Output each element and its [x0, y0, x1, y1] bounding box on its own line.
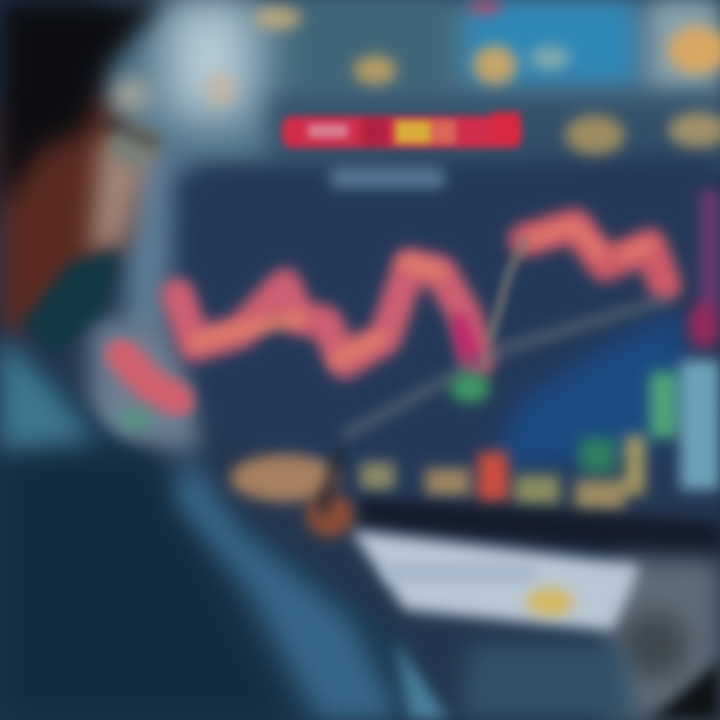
main monitor chart panel — [170, 150, 720, 505]
faint caption under the header strip — [330, 168, 445, 188]
blue market area under the chart — [490, 310, 690, 470]
yellow tiles at top of the monitor — [204, 0, 720, 155]
green and magenta markers — [117, 190, 720, 490]
person: jacket — [0, 335, 450, 720]
red and yellow header strip — [282, 112, 522, 148]
person: teal face mask — [22, 250, 120, 355]
person: head and face — [0, 0, 165, 330]
lower volume bars — [360, 435, 645, 510]
keyboard and desk — [350, 530, 720, 720]
pink price line chart — [122, 225, 665, 435]
monitor lower bezel — [360, 498, 720, 560]
person: hand holding pen — [230, 454, 354, 537]
